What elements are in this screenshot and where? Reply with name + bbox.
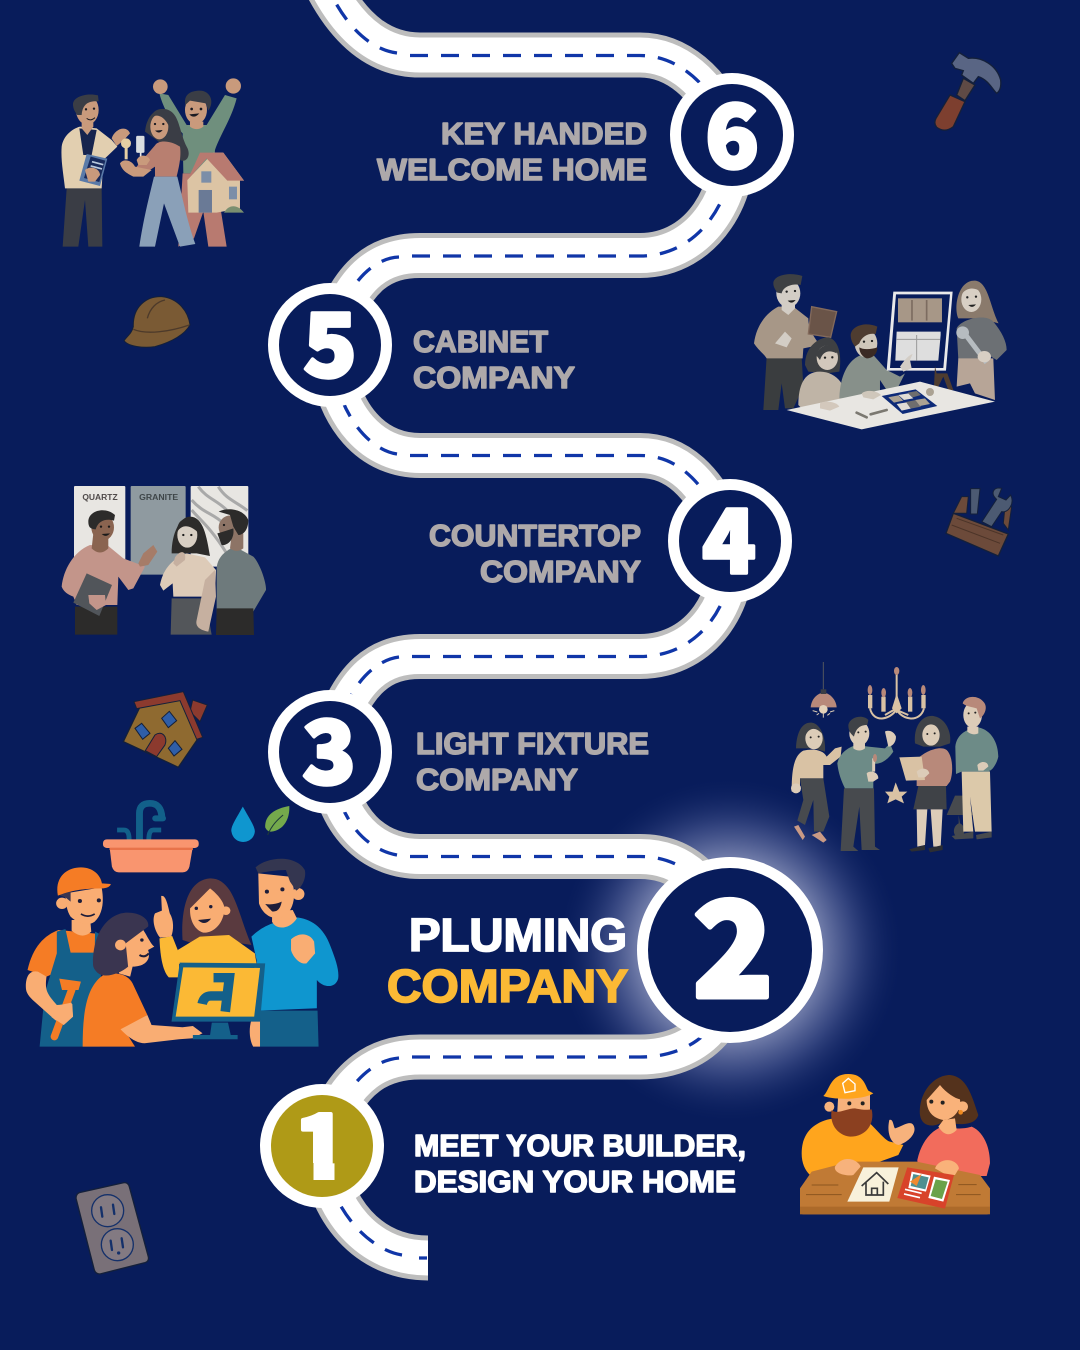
step 5 badge: 5 — [303, 276, 357, 403]
step 4 badge — [668, 472, 792, 603]
label: step 6: WELCOME HOME — [377, 152, 647, 187]
label: step 2: COMPANY — [387, 960, 628, 1012]
winding road — [322, 0, 733, 1258]
glow behind step 2 — [558, 778, 902, 1122]
step 3 badge — [268, 683, 392, 814]
illustration: plumbing team — [26, 803, 338, 1047]
step 1 badge: 1 — [294, 1077, 348, 1204]
icon: power outlet — [76, 1183, 149, 1274]
illustration: countertop samples — [62, 486, 266, 635]
label: step 4: COMPANY — [480, 554, 641, 589]
step 6 badge: 6 — [705, 67, 759, 194]
label: step 3 — [416, 726, 649, 797]
step 5 badge — [268, 276, 392, 407]
label: step 5: CABINET — [413, 324, 548, 359]
icon: tilted house — [123, 692, 207, 767]
illustration: builder and homeowner — [800, 1074, 990, 1214]
label: step 5 — [413, 324, 575, 395]
label: step 1: DESIGN YOUR HOME — [414, 1164, 736, 1199]
step 2 badge: 2 — [693, 845, 773, 1036]
label: step 3: COMPANY — [416, 762, 578, 797]
illustration: lighting team — [791, 662, 998, 852]
label: step 3: LIGHT FIXTURE — [416, 726, 649, 761]
label: step 4: COUNTERTOP — [429, 518, 641, 553]
label: step 6: KEY HANDED — [441, 116, 647, 151]
step 1 badge — [260, 1077, 384, 1208]
label: step 6 — [377, 116, 647, 187]
illustration: cabinet planning — [754, 274, 1007, 429]
label: step 2: PLUMING — [409, 909, 627, 961]
step 4 badge: 4 — [702, 472, 756, 599]
illustration: handing over keys — [61, 78, 244, 247]
illustration: countertop samples: QUARTZ — [82, 493, 118, 502]
icon: hammer — [935, 53, 1001, 130]
icon: hard hat — [124, 297, 190, 347]
step 2 badge — [637, 845, 823, 1043]
illustration: countertop samples: GRANITE — [139, 493, 179, 502]
step 3 badge: 3 — [302, 683, 356, 810]
label: step 1 — [414, 1128, 746, 1199]
label: step 4 — [429, 518, 641, 589]
step 6 badge — [670, 67, 794, 197]
label: step 1: MEET YOUR BUILDER, — [414, 1128, 746, 1163]
label: step 5: COMPANY — [413, 360, 575, 395]
label: step 2 — [387, 909, 628, 1012]
icon: toolbox — [946, 488, 1012, 556]
